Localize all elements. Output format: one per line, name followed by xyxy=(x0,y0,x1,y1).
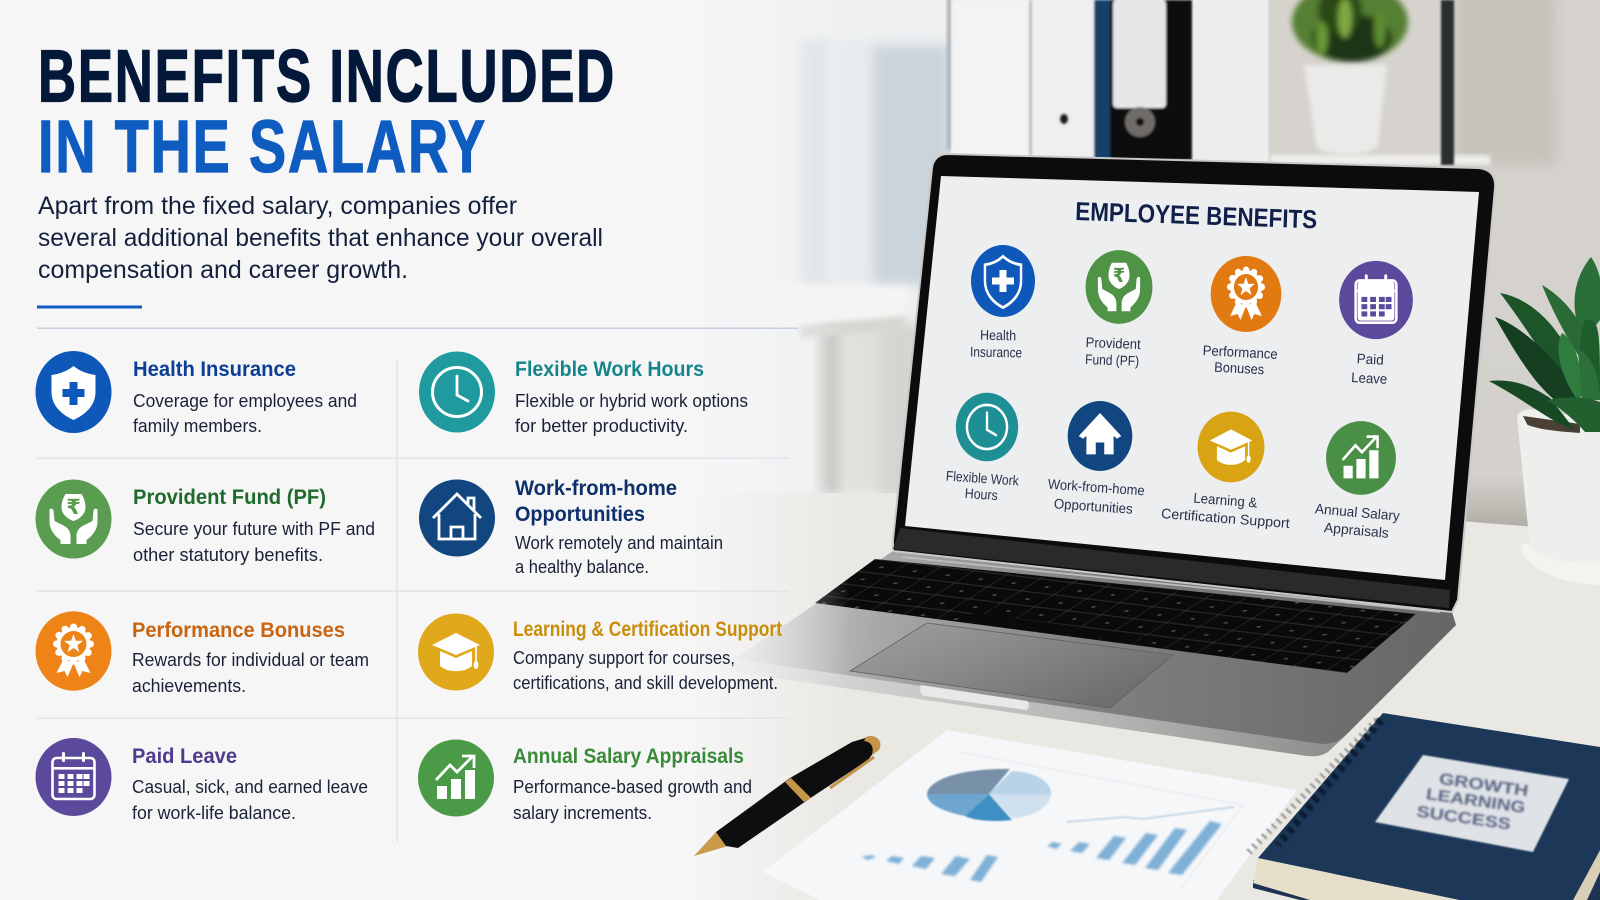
item: Work-from-home Opportunities xyxy=(419,477,723,577)
screen labels: Health xyxy=(980,327,1016,343)
item: Work-from-home Opportunities: Work remotely and maintain xyxy=(515,533,723,553)
screen labels: Work-from-home xyxy=(1047,476,1145,498)
screen labels: Opportunities xyxy=(1053,495,1133,517)
screen labels: Paid xyxy=(1356,350,1384,368)
item: Health Insurance xyxy=(36,351,357,436)
item: Performance Bonuses: Performance Bonuses xyxy=(132,619,345,642)
trackpad notch xyxy=(920,685,1029,710)
item: Provident Fund: other statutory benefits. xyxy=(133,545,323,565)
notebook xyxy=(1248,713,1600,900)
screen labels xyxy=(945,327,1400,541)
screen labels: Fund (PF) xyxy=(1085,351,1139,369)
white plant pot xyxy=(1517,417,1600,585)
accent rule xyxy=(37,306,142,308)
icon: rupee hands: ₹ xyxy=(66,495,81,519)
screen labels: Insurance xyxy=(970,344,1022,360)
document with charts xyxy=(763,730,1297,900)
screen labels: Learning & xyxy=(1193,490,1259,511)
screen icon: health insurance xyxy=(971,245,1035,317)
cover xyxy=(1258,713,1600,900)
intro paragraph: compensation and career growth. xyxy=(38,256,408,284)
screen labels: Annual Salary xyxy=(1314,500,1400,524)
notebook label: SUCCESS xyxy=(1415,804,1512,834)
spiral binding xyxy=(1248,720,1381,853)
item: Learning & Certification Support: Company support for courses, xyxy=(513,648,735,668)
item: Learning & Certification Support: Learning & Certification Support xyxy=(513,618,782,641)
screen labels: Appraisals xyxy=(1323,519,1390,541)
item: Health Insurance: Coverage for employees and xyxy=(133,391,357,411)
screen labels: Leave xyxy=(1351,369,1388,387)
screen labels: Certification Support xyxy=(1160,505,1290,531)
notebook label: GROWTH xyxy=(1438,771,1529,800)
desk plant xyxy=(1489,257,1600,434)
item: Performance Bonuses xyxy=(36,611,369,696)
notebook label: LEARNING xyxy=(1425,786,1526,817)
item: Provident Fund xyxy=(36,480,375,565)
item: Paid Leave: for work-life balance. xyxy=(132,803,296,823)
space bar xyxy=(955,613,1148,642)
item: Paid Leave: Paid Leave xyxy=(132,745,237,768)
item: Flexible Work Hours: for better productivity. xyxy=(515,416,688,436)
item: Provident Fund: Secure your future with PF and xyxy=(133,519,375,539)
item: Health Insurance: family members. xyxy=(133,416,262,436)
icon: calendar xyxy=(36,738,112,816)
icon: shield xyxy=(36,351,112,433)
item: Flexible Work Hours xyxy=(419,352,748,436)
screen bezel xyxy=(893,154,1495,612)
screen icon: provident fund xyxy=(1086,250,1152,324)
bar charts xyxy=(861,821,1222,882)
screen hinge bar xyxy=(893,528,1450,608)
item: Paid Leave xyxy=(36,738,368,823)
item: Flexible Work Hours: Flexible Work Hours xyxy=(515,358,704,381)
title xyxy=(38,34,616,188)
screen labels: Hours xyxy=(964,485,998,503)
screen icon: flexible hours xyxy=(956,393,1018,461)
notebook label xyxy=(1375,755,1569,852)
icon: growth chart xyxy=(418,740,494,816)
item: Work-from-home Opportunities: Opportunities xyxy=(515,503,645,526)
intro paragraph: Apart from the fixed salary, companies offer xyxy=(38,192,517,220)
shelf post xyxy=(1441,0,1454,165)
pie chart xyxy=(927,769,1051,821)
left white fade panel xyxy=(0,0,850,900)
back cover and pages xyxy=(1253,850,1600,900)
screen icon: paid leave xyxy=(1339,261,1413,339)
screen title: EMPLOYEE BENEFITS xyxy=(1075,196,1318,234)
screen icon: provident fund: ₹ xyxy=(1113,265,1125,287)
screen labels: Performance xyxy=(1202,342,1278,362)
shelf plant xyxy=(1292,0,1408,155)
laptop base front lip xyxy=(735,658,1345,756)
item: Work-from-home Opportunities: a healthy balance. xyxy=(515,557,649,577)
item: Learning & Certification Support xyxy=(418,614,782,693)
item: Health Insurance: Health Insurance xyxy=(133,358,296,381)
keyboard xyxy=(815,559,1416,673)
screen display xyxy=(905,176,1479,580)
speaker strip xyxy=(902,557,1440,612)
screen labels: Provident xyxy=(1085,334,1141,352)
laptop deck xyxy=(735,551,1456,744)
item: Annual Salary Appraisals: salary increments. xyxy=(513,803,652,823)
screen icon: learning xyxy=(1198,412,1264,482)
item: Performance Bonuses: Rewards for individual or team xyxy=(132,650,369,670)
icon: clock xyxy=(419,352,495,432)
item: Performance Bonuses: achievements. xyxy=(132,676,246,696)
intro paragraph xyxy=(38,192,603,284)
binders on shelf xyxy=(951,0,1268,160)
icon: medal xyxy=(36,611,112,691)
trackpad xyxy=(850,623,1173,708)
item: Annual Salary Appraisals: Performance-based growth and xyxy=(513,777,752,797)
screen labels: Bonuses xyxy=(1214,359,1265,377)
icon: graduation cap xyxy=(418,614,494,690)
item: Paid Leave: Casual, sick, and earned leave xyxy=(132,777,368,797)
icon: rupee hands xyxy=(36,480,112,558)
laptop xyxy=(735,154,1495,756)
item: Provident Fund: Provident Fund (PF) xyxy=(133,486,326,509)
pen xyxy=(694,736,881,856)
icon: house xyxy=(419,480,495,556)
screen icon: performance bonuses xyxy=(1211,256,1281,332)
item: Annual Salary Appraisals xyxy=(418,740,752,823)
white pot soil xyxy=(1517,409,1600,434)
title: BENEFITS INCLUDED xyxy=(38,34,616,118)
screen labels: Flexible Work xyxy=(945,467,1020,489)
intro paragraph: several additional benefits that enhance your overall xyxy=(38,224,603,252)
item: Flexible Work Hours: Flexible or hybrid work options xyxy=(515,391,748,411)
item: Annual Salary Appraisals: Annual Salary Appraisals xyxy=(513,745,744,768)
screen icon: appraisals xyxy=(1326,421,1396,495)
title: IN THE SALARY xyxy=(38,105,487,188)
item: Learning & Certification Support: certifications, and skill development. xyxy=(513,673,778,693)
screen icon: work from home xyxy=(1068,401,1132,471)
item: Work-from-home Opportunities: Work-from-home xyxy=(515,477,677,500)
